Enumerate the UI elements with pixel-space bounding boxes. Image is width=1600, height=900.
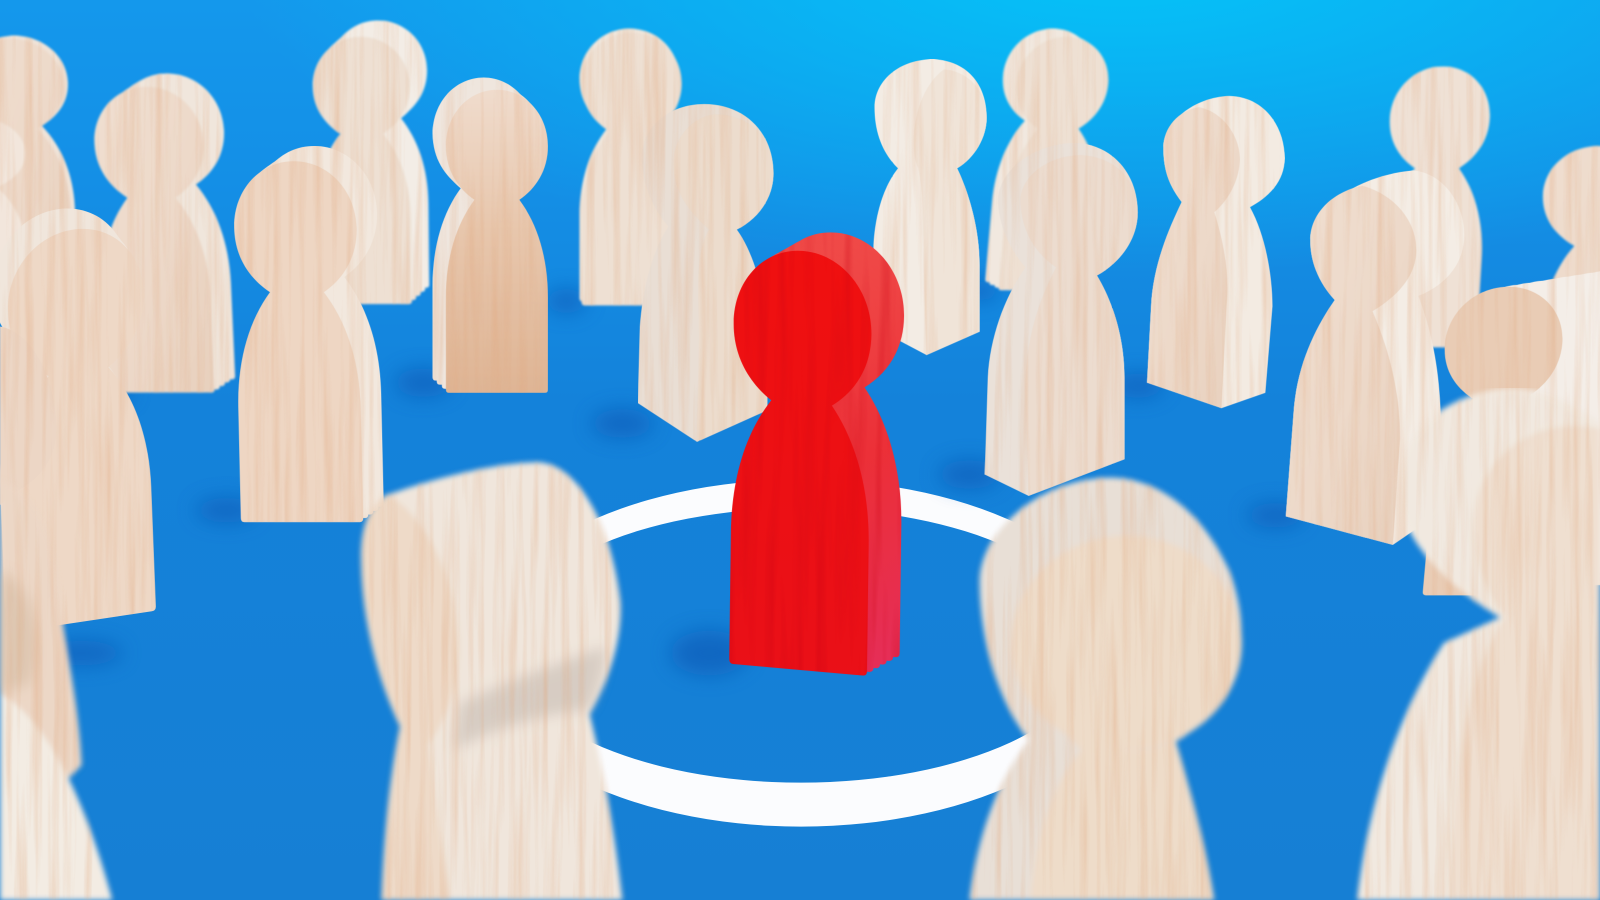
figure: left edge lower — [0, 480, 82, 784]
figure: top left — [92, 73, 235, 393]
figure: foreground left of centre — [361, 462, 622, 900]
white ring on the floor — [477, 480, 1126, 827]
figure: right of back centre — [872, 59, 987, 355]
figure: far left top — [0, 36, 79, 287]
figure: right side upper — [1422, 270, 1600, 595]
figure: behind red figure — [638, 104, 773, 442]
figure: back row second — [312, 20, 429, 304]
figure: back row centre right — [985, 29, 1112, 290]
floor shadows — [41, 281, 1304, 676]
figure: back row centre left — [580, 29, 682, 305]
figure: right of red figure — [985, 143, 1138, 496]
figure: left of ring — [233, 146, 384, 522]
figure: left edge large — [0, 199, 156, 631]
foreground wooden figures — [0, 388, 1600, 900]
figure: foreground far left — [0, 694, 112, 900]
figure: left edge middle — [0, 327, 56, 505]
figure: right middle — [1147, 96, 1285, 408]
figure: top right edge — [1543, 146, 1600, 421]
figure: back row far right — [1376, 66, 1493, 347]
middle row of wooden figures — [0, 59, 1600, 631]
figure: warm toned — [433, 78, 548, 393]
background: bright cyan glow at the top — [0, 0, 1600, 306]
red figure in the centre of the ring — [729, 227, 905, 676]
figure: foreground right of centre — [969, 478, 1242, 900]
back row of wooden figures — [0, 20, 1600, 631]
figure: far left small — [0, 117, 26, 310]
figure: right of ring — [1286, 170, 1464, 545]
figure: foreground far right — [1357, 388, 1600, 900]
